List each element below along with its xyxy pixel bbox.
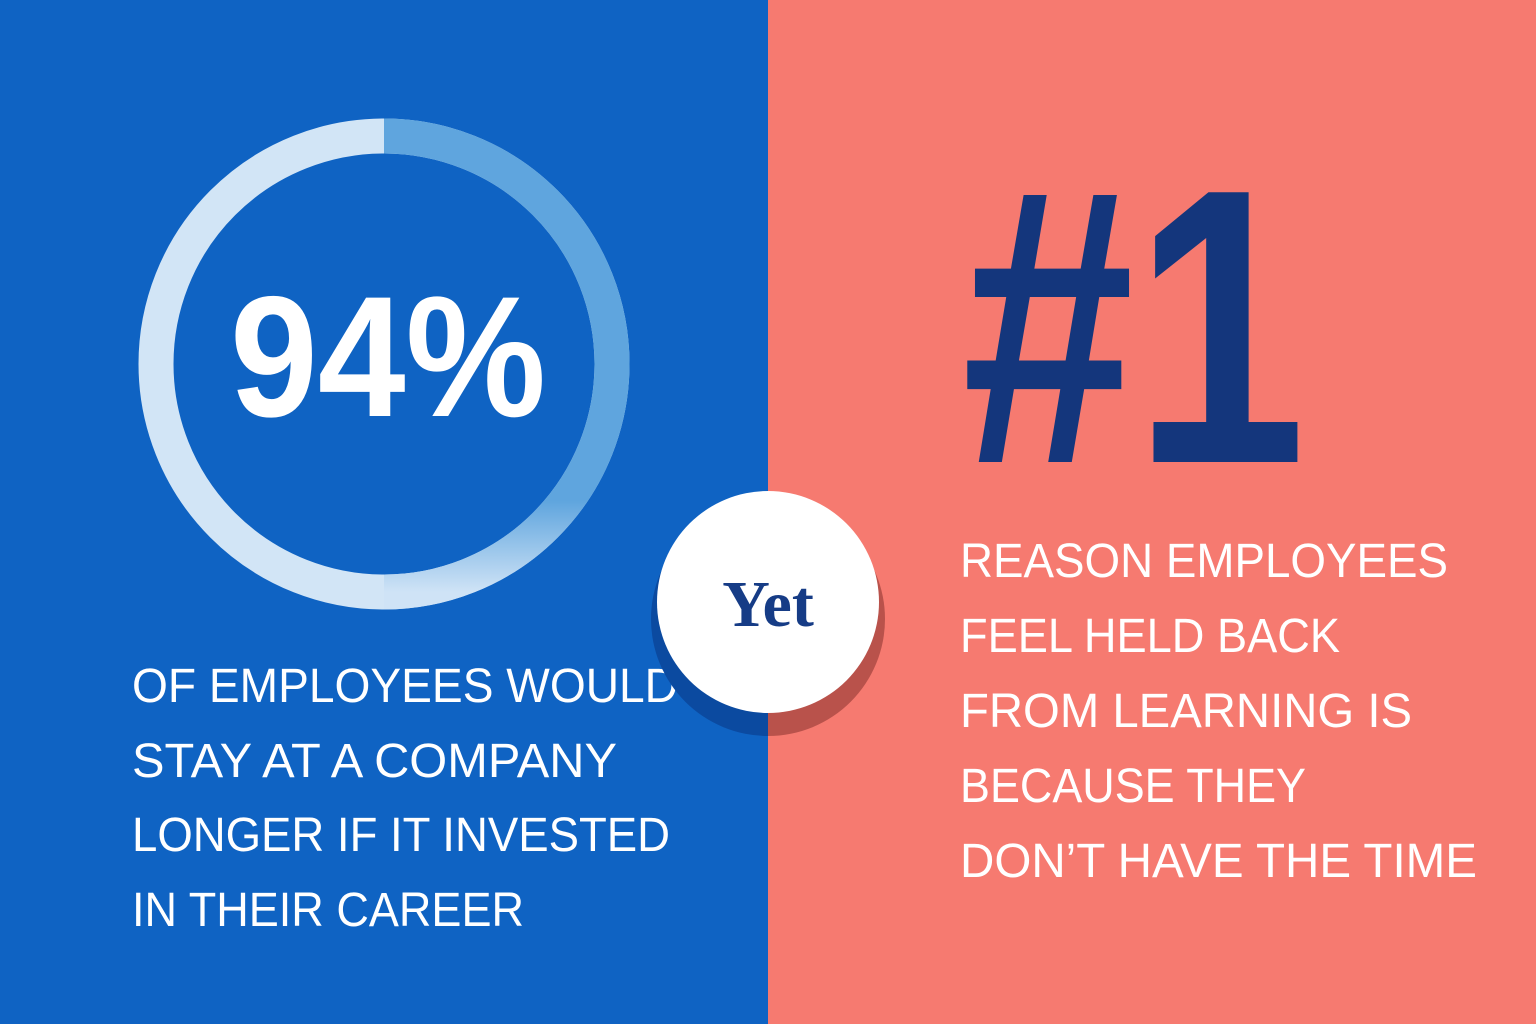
text block: right description: DON’T HAVE THE TIME <box>960 835 1477 888</box>
text block: right description: FROM LEARNING IS <box>960 685 1412 738</box>
text block: left description: STAY AT A COMPANY <box>132 735 617 788</box>
text block: left description: LONGER IF IT INVESTED <box>132 809 670 862</box>
stat: 94%: 94% <box>230 261 546 453</box>
text block: right description: FEEL HELD BACK <box>960 610 1340 663</box>
badge: Yet <box>651 491 885 736</box>
panel: right coral background <box>768 0 1536 1024</box>
stat: #1: #1 <box>962 108 1306 546</box>
text block: left description <box>132 660 678 937</box>
text block: right description <box>960 535 1477 888</box>
text block: right description: REASON EMPLOYEES <box>960 535 1448 588</box>
text block: right description: BECAUSE THEY <box>960 760 1306 813</box>
text block: left description: IN THEIR CAREER <box>132 884 524 937</box>
badge: Yet: Yet <box>722 568 814 641</box>
panel: left blue background <box>0 0 768 1024</box>
ring chart: 94% <box>156 136 612 592</box>
text block: left description: OF EMPLOYEES WOULD <box>132 660 678 713</box>
